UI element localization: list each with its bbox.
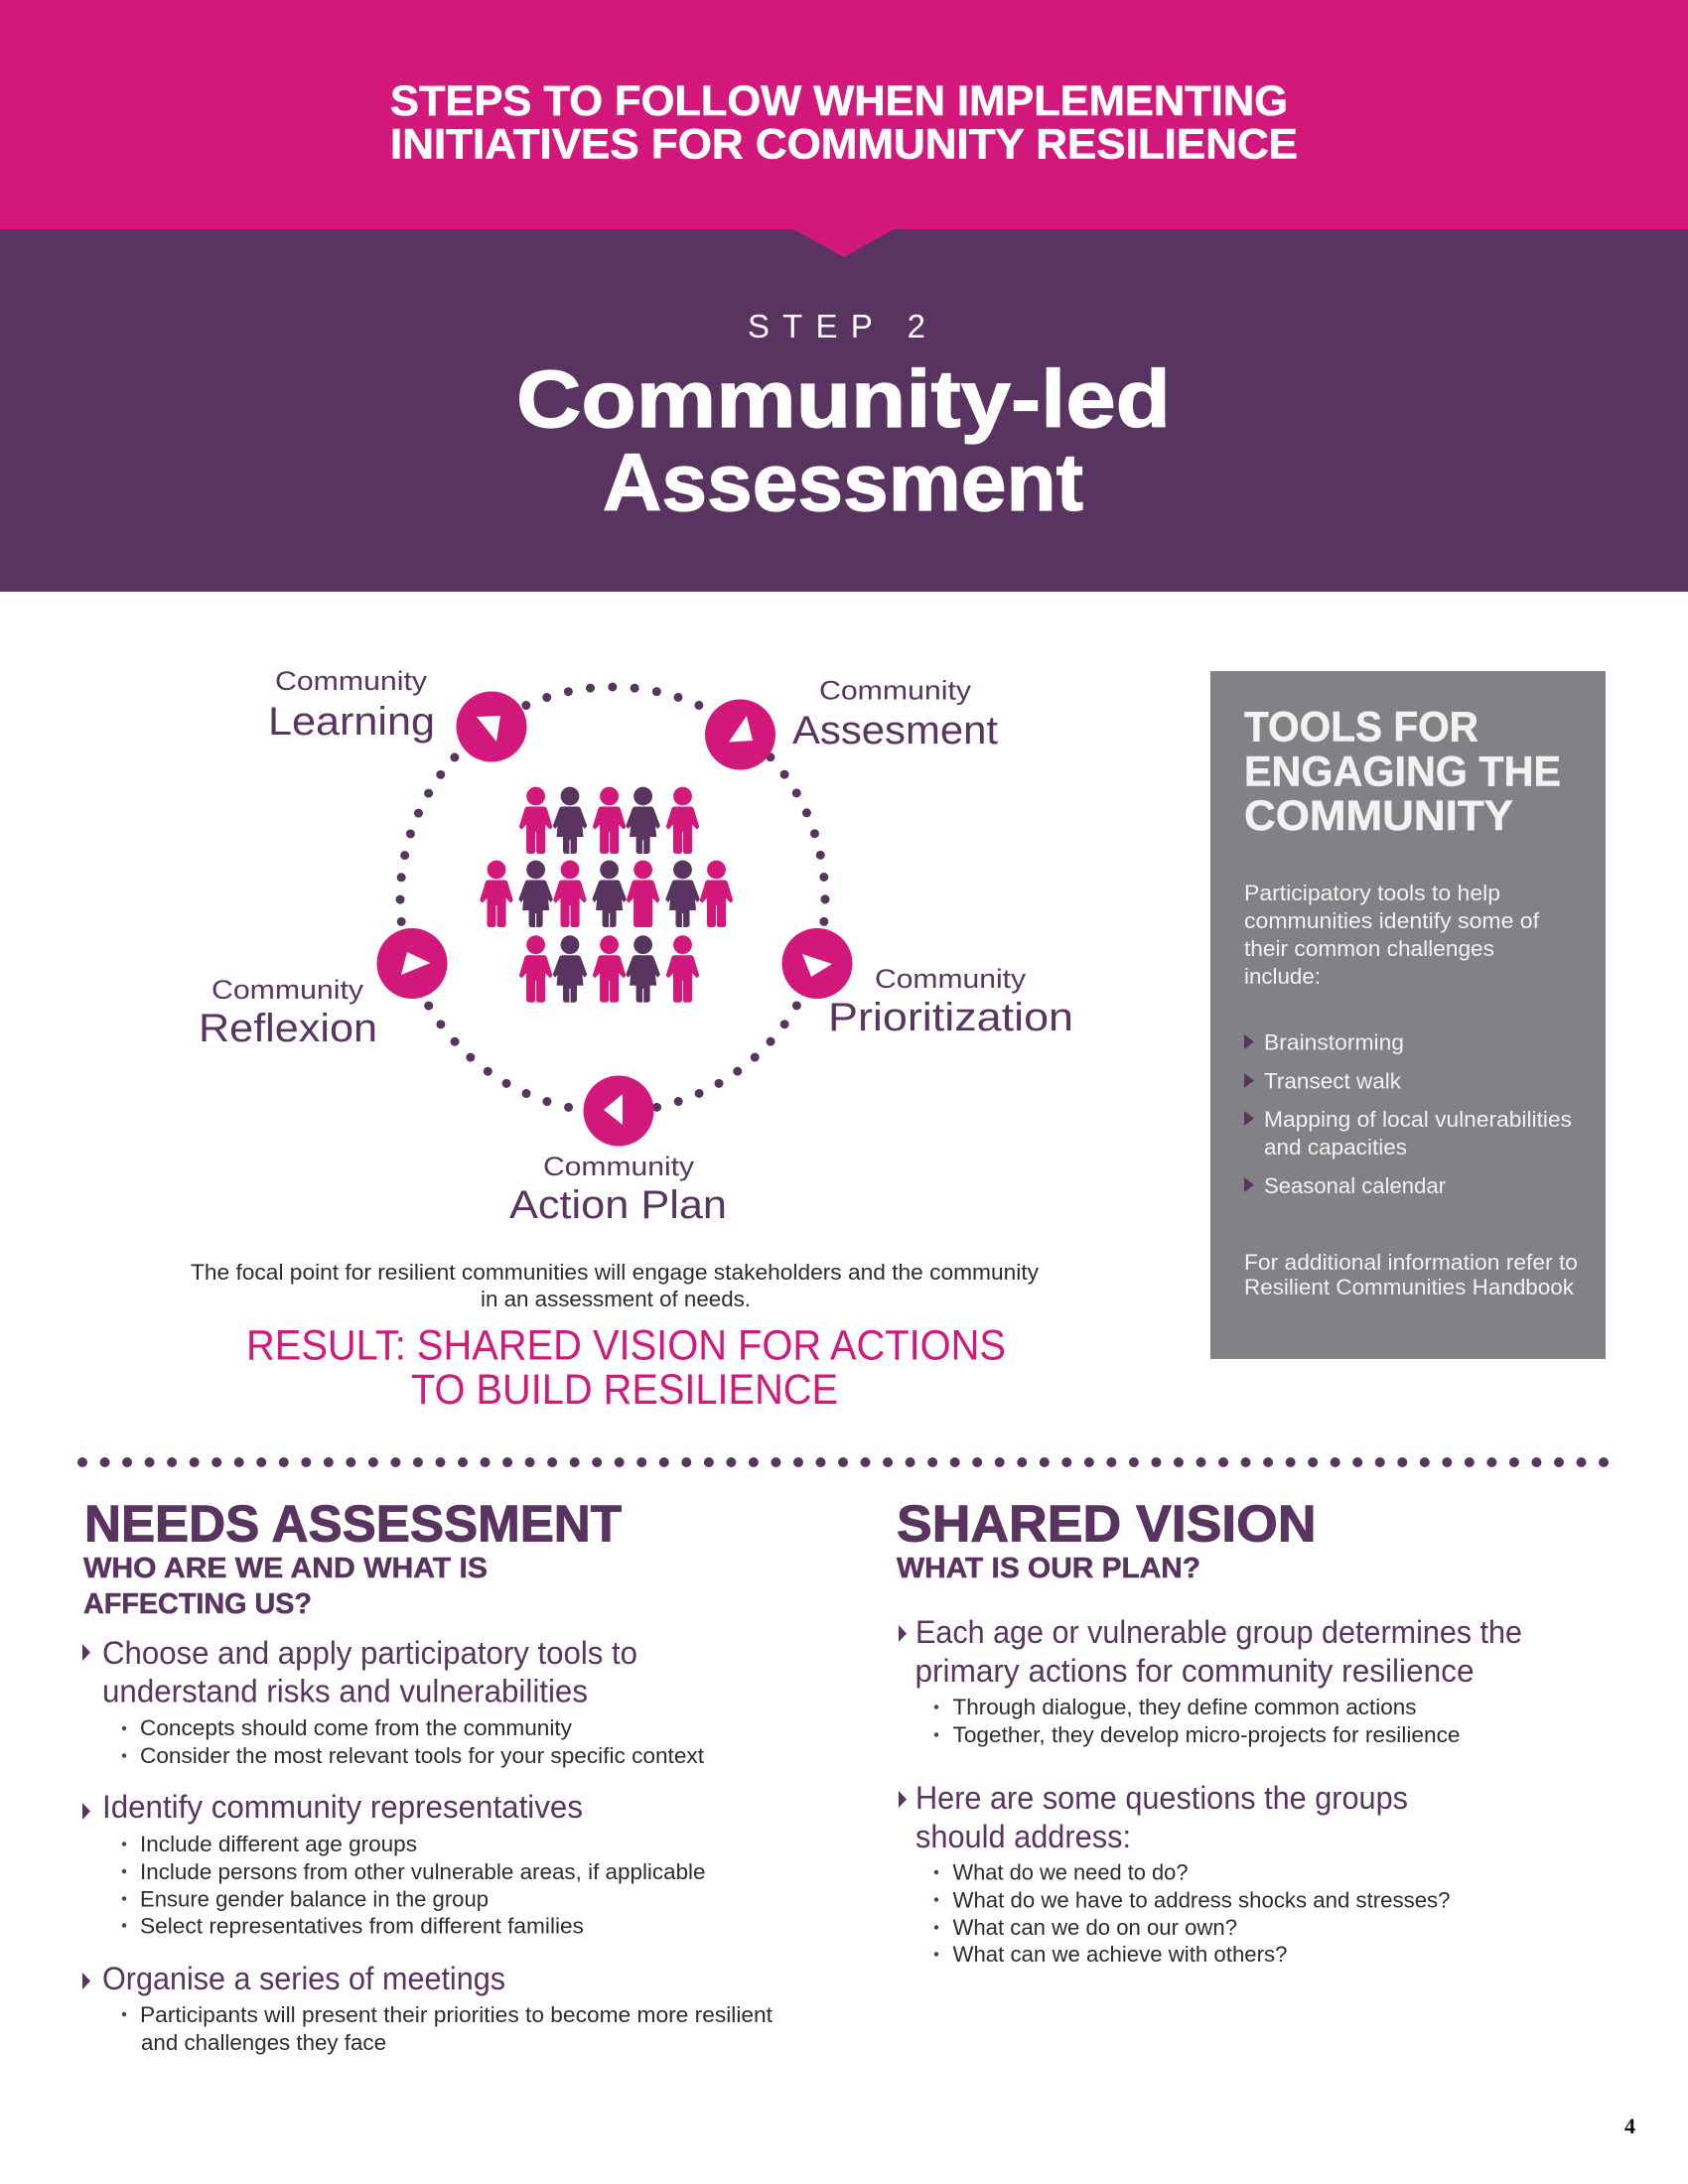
header banner: pink with pointer notch (0, 0, 1688, 257)
item: organise meetings (82, 1961, 773, 2055)
node: community action plan: Action Plan (509, 1183, 727, 1227)
step heading: Assessment (603, 438, 1083, 528)
heading: needs assessment: NEEDS ASSESSMENT (84, 1495, 622, 1553)
node: community assessment: Assesment (792, 709, 998, 752)
item: choose and apply tools: Consider the most relevant tools for your specific context (140, 1743, 704, 1768)
header banner: purple step panel (0, 228, 1688, 592)
panel tool list: Transect walk (1264, 1068, 1402, 1094)
title: steps to follow (390, 77, 1298, 169)
item: age or vulnerable groups: Together, they develop micro-projects for resilience (953, 1722, 1460, 1747)
item: age or vulnerable groups: primary actions for community resilience (915, 1653, 1474, 1689)
panel intro text: Participatory tools to help (1244, 881, 1500, 905)
item: choose and apply tools: understand risks and vulnerabilities (102, 1674, 588, 1709)
item: age or vulnerable groups: Each age or vulnerable group determines the (915, 1614, 1522, 1650)
node: community learning: Learning (268, 700, 435, 744)
item: questions to address: What can we achieve with others? (953, 1942, 1287, 1967)
icon: group of people (480, 787, 733, 1003)
item: identify representatives: Ensure gender balance in the group (140, 1886, 489, 1912)
node: community prioritization: Prioritization (828, 996, 1073, 1039)
subheading: what is our plan: WHAT IS OUR PLAN? (897, 1553, 1200, 1584)
panel footnote: For additional information refer to (1244, 1250, 1578, 1275)
item: identify representatives: Include different age groups (140, 1832, 417, 1856)
subheading: who are we (83, 1553, 488, 1620)
item: choose and apply tools (82, 1635, 704, 1768)
item: identify representatives: Identify community representatives (102, 1789, 583, 1825)
text block: focal point description (191, 1260, 1039, 1311)
panel tool list: Mapping of local vulnerabilities (1264, 1107, 1572, 1132)
node: community prioritization (782, 928, 1073, 1039)
item: organise meetings: Participants will present their priorities to become more resilient (140, 2002, 773, 2027)
panel footnote (1244, 1250, 1578, 1299)
item: identify representatives: Include persons from other vulnerable areas, if applicable (140, 1859, 705, 1884)
node: community action plan (509, 1076, 727, 1227)
panel intro text (1244, 881, 1540, 989)
node: community learning: Community (275, 666, 428, 696)
panel intro text: include: (1244, 964, 1321, 989)
panel heading: COMMUNITY (1244, 792, 1513, 840)
panel tool list: and capacities (1264, 1135, 1407, 1160)
item: questions to address (899, 1780, 1450, 1967)
cycle diagram (199, 666, 1073, 1227)
subheading: who are we: WHO ARE WE AND WHAT IS (83, 1553, 488, 1584)
callout: result: RESULT: SHARED VISION FOR ACTIONS (246, 1322, 1006, 1370)
panel tool list: Seasonal calendar (1264, 1173, 1446, 1198)
node: community prioritization: Community (875, 964, 1027, 994)
node: community reflexion (199, 928, 447, 1050)
item: identify representatives (82, 1789, 705, 1938)
node: community assessment: Community (819, 675, 972, 705)
panel heading: ENGAGING THE (1244, 749, 1561, 796)
panel heading: TOOLS FOR (1244, 703, 1478, 751)
item: age or vulnerable groups (899, 1614, 1522, 1747)
panel footnote: Resilient Communities Handbook (1244, 1275, 1575, 1299)
callout: result (246, 1322, 1006, 1414)
page number: 4 (1624, 2114, 1635, 2138)
panel tool list (1244, 1030, 1572, 1198)
node: community action plan: Community (543, 1152, 695, 1181)
step heading: Community-led (516, 354, 1171, 445)
title: steps to follow: INITIATIVES FOR COMMUNITY RESILIENCE (390, 121, 1298, 169)
item: questions to address: should address: (915, 1819, 1131, 1854)
item: organise meetings: Organise a series of meetings (102, 1961, 505, 1996)
node: community assessment (705, 675, 998, 770)
item: identify representatives: Select representatives from different families (140, 1914, 584, 1938)
item: questions to address: Here are some questions the groups (915, 1780, 1408, 1816)
subheading: who are we: AFFECTING US? (83, 1588, 312, 1620)
title: steps to follow: STEPS TO FOLLOW WHEN IMPLEMENTING (390, 77, 1288, 125)
panel: tools for engaging the community (1210, 671, 1606, 1359)
node: community reflexion: Reflexion (199, 1007, 377, 1050)
panel tool list: Brainstorming (1264, 1030, 1404, 1054)
step label: STEP 2 (748, 308, 925, 344)
node: community learning (268, 666, 526, 762)
callout: result: TO BUILD RESILIENCE (411, 1366, 838, 1414)
text block: focal point description: in an assessment of needs. (481, 1287, 751, 1311)
panel intro text: communities identify some of (1244, 908, 1540, 933)
step heading (516, 354, 1171, 528)
node: community reflexion: Community (211, 975, 364, 1005)
heading: shared vision: SHARED VISION (897, 1495, 1317, 1553)
item: questions to address: What can we do on our own? (953, 1915, 1237, 1940)
text block: focal point description: The focal point for resilient communities will engage stakeholders and the community (191, 1260, 1039, 1285)
item: organise meetings: and challenges they face (141, 2030, 386, 2055)
item: questions to address: What do we have to address shocks and stresses? (953, 1888, 1450, 1912)
item: choose and apply tools: Concepts should come from the community (140, 1715, 572, 1740)
panel heading (1244, 703, 1561, 840)
panel: shared vision (897, 1495, 1522, 1967)
panel intro text: their common challenges (1244, 936, 1494, 961)
item: age or vulnerable groups: Through dialogue, they define common actions (953, 1695, 1416, 1719)
dotted ring (400, 687, 825, 1112)
item: choose and apply tools: Choose and apply participatory tools to (102, 1635, 637, 1671)
panel: needs assessment (82, 1495, 773, 2055)
item: questions to address: What do we need to do? (953, 1860, 1188, 1884)
